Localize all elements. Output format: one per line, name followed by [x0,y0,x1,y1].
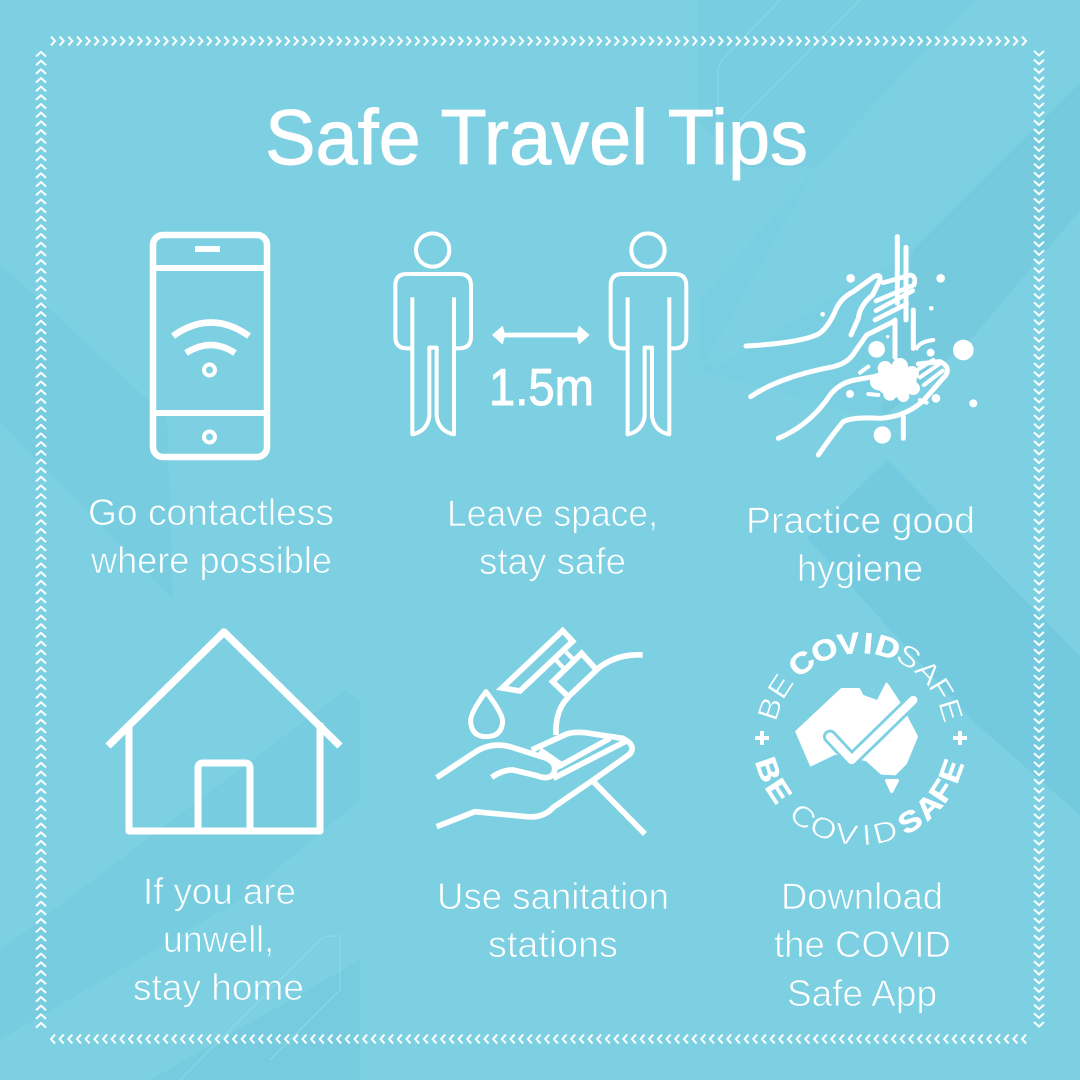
soap foam [870,358,920,402]
icon: washing hands [746,237,977,455]
icon: smartphone with wifi [153,235,267,457]
badge: top arc text: A [909,653,948,692]
label: 1.5m: 1.5m [489,359,594,417]
hand [437,745,555,778]
icon: COVIDSafe badge [749,626,970,852]
icon: right person [611,233,686,434]
pump head [502,631,573,691]
badge: bottom arc text: E [759,773,798,809]
badge: bottom arc text: O [805,808,842,848]
badge: bottom arc text: I [861,818,873,852]
caption: sanitation stations: stations [488,924,618,965]
caption: stay home [133,871,304,1008]
badge: bottom arc text: F [922,774,961,808]
droplets [820,274,977,444]
badge: Australia map [797,684,917,791]
badge: top arc text: V [835,626,862,661]
icon: hand sanitiser [437,631,645,834]
badge: bottom arc text: C [784,796,822,837]
badge: top arc text: E [932,695,969,726]
badge: top arc text: C [782,643,821,684]
badge: top arc text [751,626,969,726]
upper hand [746,276,880,346]
stand line [593,782,645,834]
caption: go contactless [88,492,334,581]
caption: stay home: stay home [133,967,304,1008]
badge: top arc text: E [761,668,800,705]
caption: download app [774,876,951,1014]
badge: top arc text: O [806,630,843,670]
caption: stay home: If you are [143,871,296,912]
caption: leave space [447,493,658,582]
caption: good hygiene: Practice good [746,500,975,541]
badge: top arc text: I [862,627,874,660]
caption: leave space: stay safe [479,541,626,582]
caption: sanitation stations: Use sanitation [437,876,669,917]
second arm [751,322,893,397]
arrow: distance [492,326,590,345]
caption: sanitation stations [437,876,669,965]
badge: top arc text: S [891,637,927,676]
caption: download app: Safe App [787,973,937,1014]
badge: check mark [830,700,913,760]
icon: two people 1.5m apart [395,233,686,434]
badge: top arc text: D [871,628,904,666]
caption: go contactless: Go contactless [88,492,334,533]
caption: stay home: unwell, [163,919,274,960]
lower hand [778,377,873,438]
caption: good hygiene [746,500,975,589]
droplet [471,692,503,737]
title: Safe Travel Tips [265,93,808,181]
badge: top arc text: F [922,672,960,706]
caption: download app: the COVID [774,924,951,965]
bottle [553,653,597,697]
icon: left person [395,233,471,434]
badge: bottom arc text: V [833,817,860,852]
badge: bottom arc text: D [869,813,901,851]
caption: leave space: Leave space, [447,493,658,534]
badge: top arc text: B [751,693,789,724]
badge: bottom arc text: B [749,753,787,786]
caption: download app: Download [781,876,943,917]
badge: bottom arc text: S [892,802,928,841]
badge: bottom arc text [749,753,970,852]
caption: go contactless: where possible [90,540,332,581]
water streams [895,237,913,438]
badge: plus signs [755,731,967,745]
badge: bottom arc text: E [932,755,970,787]
badge: bottom arc text: A [909,787,949,827]
caption: good hygiene: hygiene [797,548,923,589]
icon: house [108,632,340,831]
